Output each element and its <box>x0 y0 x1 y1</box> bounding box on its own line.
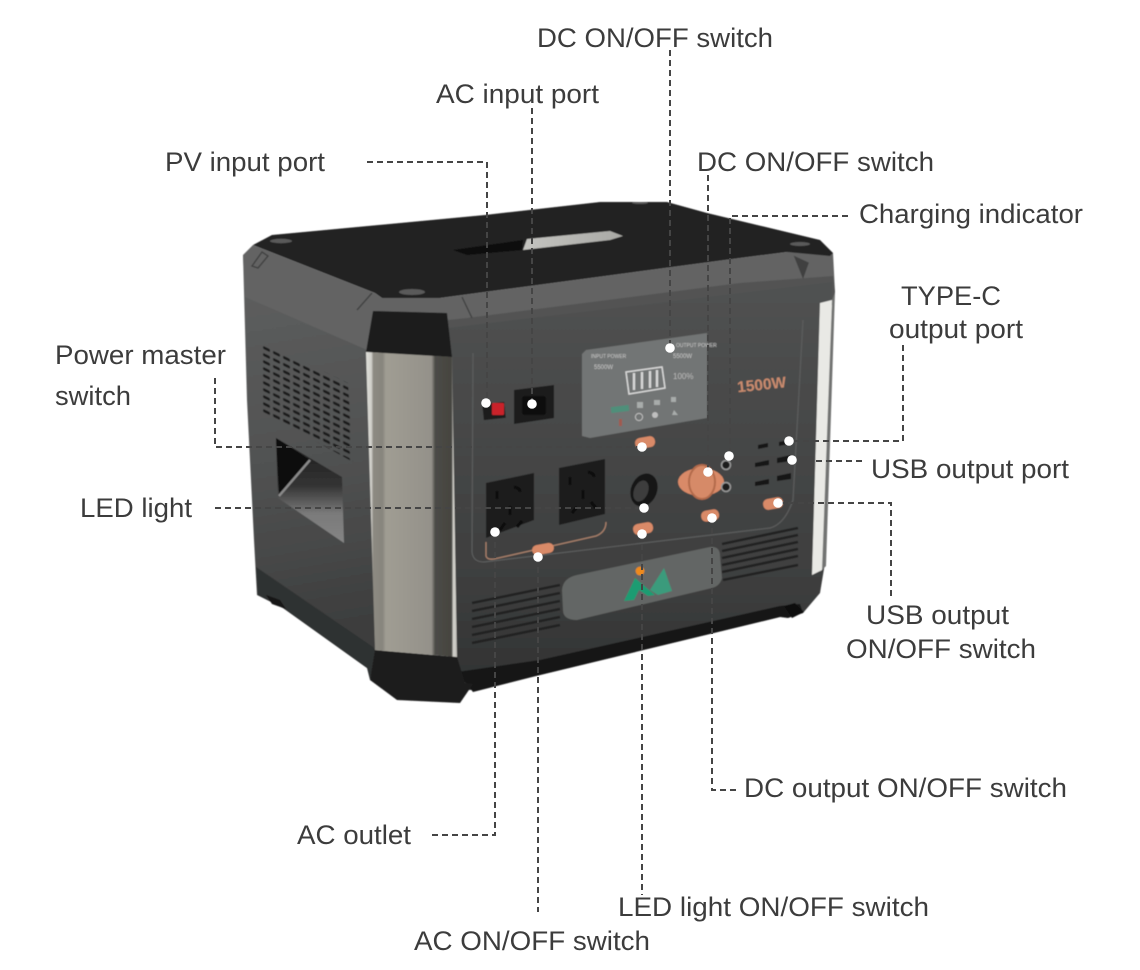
orange rocker switches <box>531 435 784 556</box>
display screen: 100% <box>673 372 693 381</box>
1500W rating: 1500W <box>736 374 787 396</box>
USB and Type-C ports <box>755 440 791 486</box>
left side panel <box>243 255 375 668</box>
label: Power master switch: Power master <box>55 340 226 370</box>
label: PV input port: PV input port <box>165 147 326 177</box>
display screen: INPUT POWER <box>591 354 627 360</box>
leader lines <box>215 50 903 912</box>
display screen: OUTPUT POWER <box>676 343 717 349</box>
DC car socket <box>678 465 724 499</box>
black front corner block <box>366 311 452 357</box>
right steel pillar <box>812 292 835 575</box>
lower right vent <box>722 528 798 580</box>
display screen <box>582 333 717 438</box>
LED lamp <box>626 469 662 511</box>
frame corner clips <box>252 252 808 318</box>
front panel inset outline <box>472 320 803 562</box>
label: TYPE-C output port: TYPE-C <box>901 281 1001 311</box>
label: AC outlet: AC outlet <box>297 820 412 850</box>
AC socket left <box>486 473 534 538</box>
label: USB output ON/OFF switch: ON/OFF switch <box>846 634 1036 664</box>
left rubber foot <box>266 595 286 609</box>
display screen: 5500W <box>594 365 613 371</box>
corner feet on top <box>270 202 810 295</box>
frame lower shade <box>448 276 835 362</box>
black bottom band <box>457 604 803 692</box>
label: LED light ON/OFF switch: LED light ON/OFF switch <box>618 892 929 922</box>
label: DC ON/OFF switch: DC ON/OFF switch <box>697 147 934 177</box>
lower left vent <box>472 585 560 643</box>
label: USB output ON/OFF switch <box>846 600 1036 664</box>
PV input connector <box>482 402 506 420</box>
label: DC ON/OFF switch (top): DC ON/OFF switch <box>537 23 773 53</box>
label: DC output ON/OFF switch: DC output ON/OFF switch <box>744 773 1067 803</box>
product: portable power station <box>243 202 835 703</box>
upper grey frame <box>243 245 835 362</box>
label: Power master switch: switch <box>55 381 131 411</box>
label: LED light: LED light <box>80 493 193 523</box>
side carry handle opening <box>276 438 344 543</box>
front corner base <box>370 650 473 703</box>
AC bracket outline <box>486 522 606 559</box>
side vent grid <box>262 342 353 462</box>
label: USB output ON/OFF switch: USB output <box>866 600 1010 630</box>
DC round ports <box>722 460 730 492</box>
label: USB output port: USB output port <box>871 454 1070 484</box>
label: AC ON/OFF switch: AC ON/OFF switch <box>414 926 650 956</box>
AC input socket <box>514 385 554 424</box>
label: TYPE-C output port: output port <box>889 314 1024 344</box>
right rubber foot <box>784 603 804 618</box>
side lower band <box>256 567 376 680</box>
top plate <box>253 202 833 298</box>
top handle recess <box>453 231 623 255</box>
display screen: 5500W <box>673 354 692 360</box>
front panel <box>448 282 832 690</box>
label: TYPE-C output port <box>889 281 1024 344</box>
label: Power master switch <box>55 340 226 411</box>
green logo <box>624 567 672 601</box>
label: Charging indicator: Charging indicator <box>859 199 1083 229</box>
left steel pillar <box>366 352 457 657</box>
label: AC input port: AC input port <box>436 79 600 109</box>
callout anchor dots <box>481 343 797 562</box>
logo plate <box>562 547 722 620</box>
AC socket right <box>559 459 605 525</box>
